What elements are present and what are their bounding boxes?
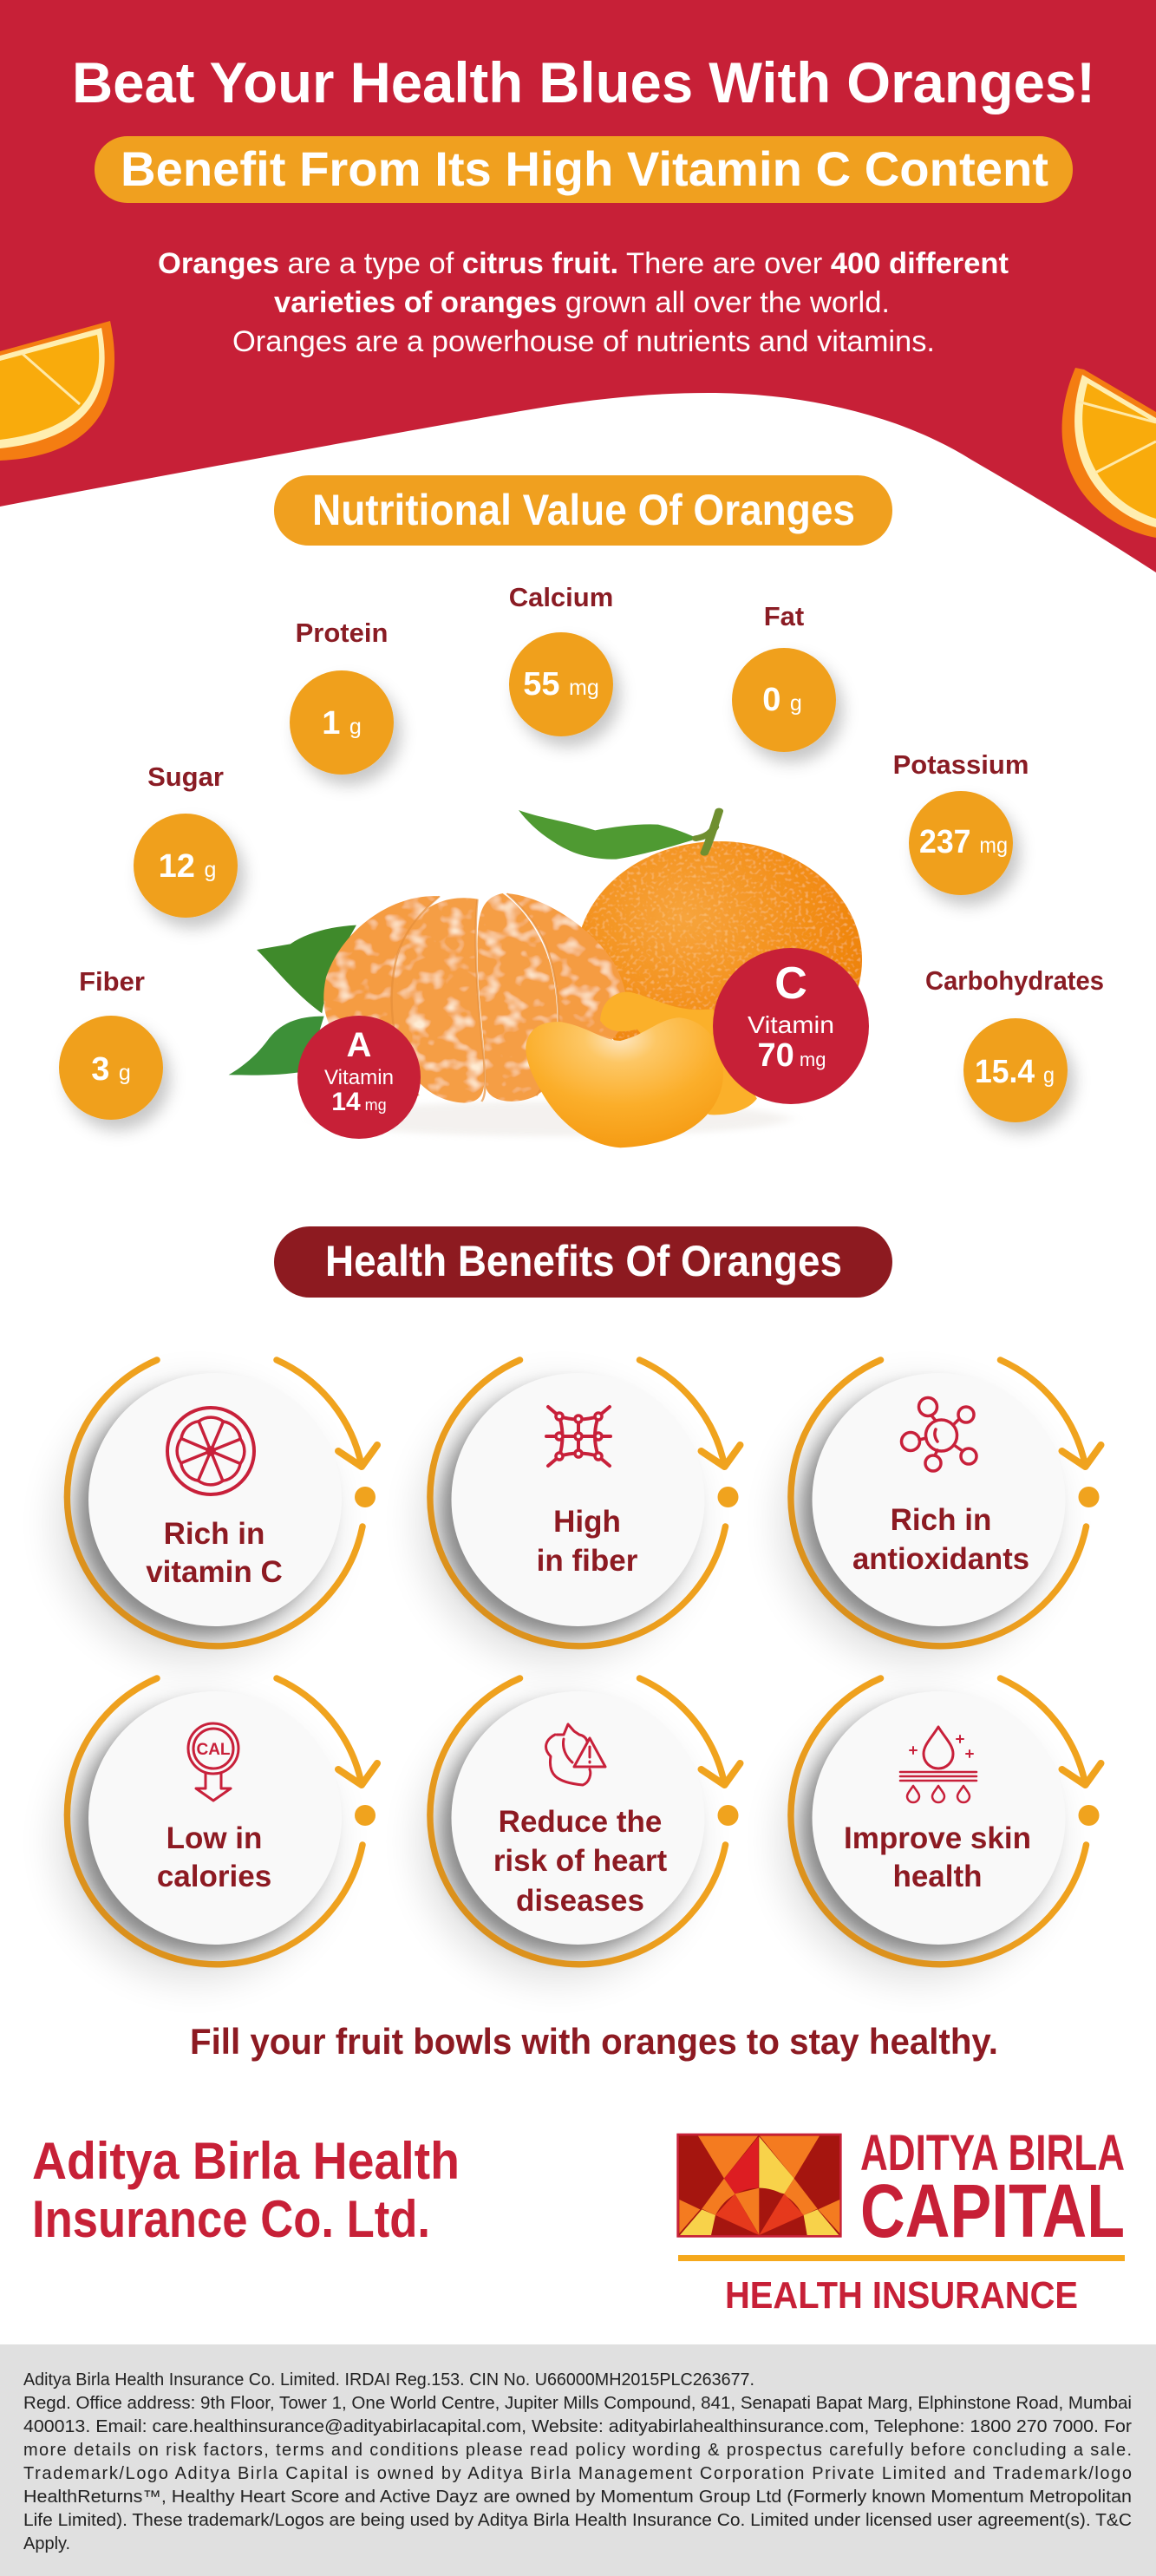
company name: Insurance Co. Ltd. xyxy=(32,2190,430,2248)
intro paragraph xyxy=(158,247,1009,358)
card: high in fiber: High xyxy=(553,1505,621,1539)
title: Beat Your Health Blues With Oranges! xyxy=(72,50,1095,114)
badge: vitamin A xyxy=(297,1016,421,1139)
nutrient: fat xyxy=(732,601,836,752)
company name: Aditya Birla Health xyxy=(32,2132,460,2190)
card: low in calories: calories xyxy=(157,1860,271,1893)
footer disclaimer: Aditya Birla Health Insurance Co. Limited. IRDAI Reg.153. CIN No. U66000MH2015PLC263677. xyxy=(23,2370,754,2390)
footer disclaimer: Trademark/Logo Aditya Birla Capital is owned by Aditya Birla Management Corporation Private Limited and Trademark/logo xyxy=(23,2464,1132,2483)
footer disclaimer: 400013. Email: care.healthinsurance@adityabirlacapital.com, Website: adityabirlahealthinsurance.com, Telephone: 1800 270 7000. For xyxy=(23,2417,1132,2436)
logo: Aditya Birla Capital mark xyxy=(678,2135,840,2236)
badge: vitamin A: Vitamin xyxy=(324,1066,394,1089)
card: improve skin health: health xyxy=(892,1860,983,1893)
footer disclaimer xyxy=(0,2344,1156,2576)
nutrient: sugar xyxy=(134,762,238,918)
card: reduce risk of heart diseases: Reduce the xyxy=(499,1805,662,1839)
card: rich in antioxidants: Rich in xyxy=(891,1503,991,1537)
card: rich in vitamin C xyxy=(56,1360,377,1662)
intro paragraph: Oranges are a type of citrus fruit. There are over 400 different xyxy=(158,247,1009,280)
footer disclaimer: Regd. Office address: 9th Floor, Tower 1, One World Centre, Jupiter Mills Compound, 841, Senapati Bapat Marg, Elphinstone Road, Mumbai xyxy=(23,2394,1132,2413)
card: low in calories: Low in xyxy=(167,1821,262,1855)
nutrient: fat: Fat xyxy=(764,601,804,631)
nutrient: fat: 0 g xyxy=(762,682,802,718)
nutrient: carbohydrates xyxy=(925,965,1104,1122)
card: reduce risk of heart diseases xyxy=(420,1678,741,1980)
nutrient: fiber: Fiber xyxy=(79,966,145,997)
nutrient: protein: 1 g xyxy=(322,705,362,742)
icon: orange slice left xyxy=(0,321,114,461)
intro paragraph: Oranges are a powerhouse of nutrients and vitamins. xyxy=(232,325,935,358)
badge: vitamin A: 14 mg xyxy=(331,1088,387,1116)
heading pill: nutritional value xyxy=(274,475,892,546)
footer disclaimer: HealthReturns™, Healthy Heart Score and Active Dayz are owned by Momentum Group Ltd (Formerly known Momentum Metropolitan xyxy=(23,2488,1132,2507)
card: rich in antioxidants xyxy=(780,1360,1101,1662)
heading pill: health benefits: Health Benefits Of Oranges xyxy=(325,1237,842,1285)
icon: calorie down arrow xyxy=(188,1723,238,1801)
photo: oranges and leaves xyxy=(229,810,862,1147)
icon: orange slice right xyxy=(1062,368,1156,538)
card: high in fiber: in fiber xyxy=(537,1544,638,1578)
nutrient: protein: Protein xyxy=(296,618,388,648)
card: rich in vitamin C: vitamin C xyxy=(146,1555,283,1589)
badge: vitamin C: 70 mg xyxy=(758,1037,826,1074)
heading pill: nutritional value: Nutritional Value Of Oranges xyxy=(312,486,855,534)
footer disclaimer: Apply. xyxy=(23,2534,70,2553)
icon: molecule xyxy=(902,1398,976,1471)
footer disclaimer: Life Limited). These trademark/Logos are being used by Aditya Birla Health Insurance Co. Limited under licensed user agreement(s). T&C xyxy=(23,2511,1132,2530)
card: reduce risk of heart diseases: diseases xyxy=(516,1884,644,1918)
nutrient: protein xyxy=(290,618,394,775)
card: improve skin health xyxy=(780,1678,1101,1980)
nutrient: sugar: 12 g xyxy=(159,848,216,885)
card: improve skin health: Improve skin xyxy=(844,1821,1031,1855)
subtitle pill: Benefit From Its High Vitamin C Content xyxy=(121,141,1048,196)
icon: citrus slice xyxy=(167,1408,254,1494)
nutrient: carbohydrates: 15.4 g xyxy=(975,1054,1055,1090)
red wave header background xyxy=(0,0,1156,572)
nutrient: calcium: 55 mg xyxy=(523,666,599,703)
nutrient: calcium xyxy=(509,582,613,736)
card: low in calories xyxy=(56,1678,377,1980)
icon: calorie down arrow: CAL xyxy=(196,1741,231,1759)
logo wordmark xyxy=(860,2125,1125,2253)
logo divider bar xyxy=(678,2255,1125,2261)
footer disclaimer: more details on risk factors, terms and conditions please read policy wording & prospectus carefully before concluding a sale. xyxy=(23,2441,1132,2460)
badge: vitamin C: C xyxy=(774,958,807,1009)
heading pill: health benefits xyxy=(274,1226,892,1298)
icon: heart with warning triangle xyxy=(546,1724,605,1785)
badge: vitamin C: Vitamin xyxy=(748,1011,834,1038)
icon: fiber mesh xyxy=(546,1407,611,1466)
card: rich in antioxidants: antioxidants xyxy=(852,1542,1029,1576)
nutrient: sugar: Sugar xyxy=(147,762,224,792)
card: high in fiber xyxy=(420,1360,741,1662)
icon: skin droplets xyxy=(900,1727,976,1802)
nutrient: potassium: 237 mg xyxy=(919,824,1008,860)
company name xyxy=(32,2132,460,2248)
nutrient: potassium: Potassium xyxy=(893,749,1029,780)
closing message: Fill your fruit bowls with oranges to stay healthy. xyxy=(190,2021,998,2062)
nutrient: fiber: 3 g xyxy=(91,1051,131,1088)
logo tagline: HEALTH INSURANCE xyxy=(725,2274,1078,2317)
card: rich in vitamin C: Rich in xyxy=(164,1517,265,1551)
nutrient: calcium: Calcium xyxy=(509,582,613,612)
badge: vitamin C xyxy=(713,948,869,1104)
card: reduce risk of heart diseases: risk of heart xyxy=(493,1844,668,1878)
intro paragraph: varieties of oranges grown all over the world. xyxy=(274,286,890,319)
nutrient: fiber xyxy=(59,966,163,1120)
nutrient: carbohydrates: Carbohydrates xyxy=(925,965,1104,996)
nutrient: potassium xyxy=(893,749,1029,895)
badge: vitamin A: A xyxy=(347,1026,371,1064)
